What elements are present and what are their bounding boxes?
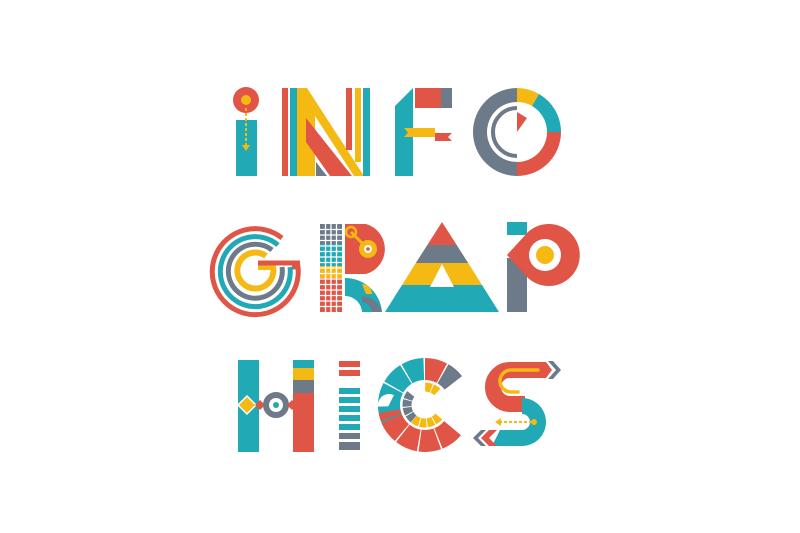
letter: R	[320, 224, 385, 312]
letter: O	[473, 88, 561, 176]
letter: C	[389, 369, 461, 441]
letter: S	[473, 361, 561, 446]
letter: G	[212, 229, 300, 315]
letter: P	[507, 222, 580, 312]
letter: I	[339, 361, 360, 450]
letter: H	[238, 360, 314, 452]
letter: A	[385, 222, 499, 312]
letter: F	[395, 88, 452, 176]
letter: i	[233, 87, 259, 176]
letter: N	[282, 88, 370, 176]
